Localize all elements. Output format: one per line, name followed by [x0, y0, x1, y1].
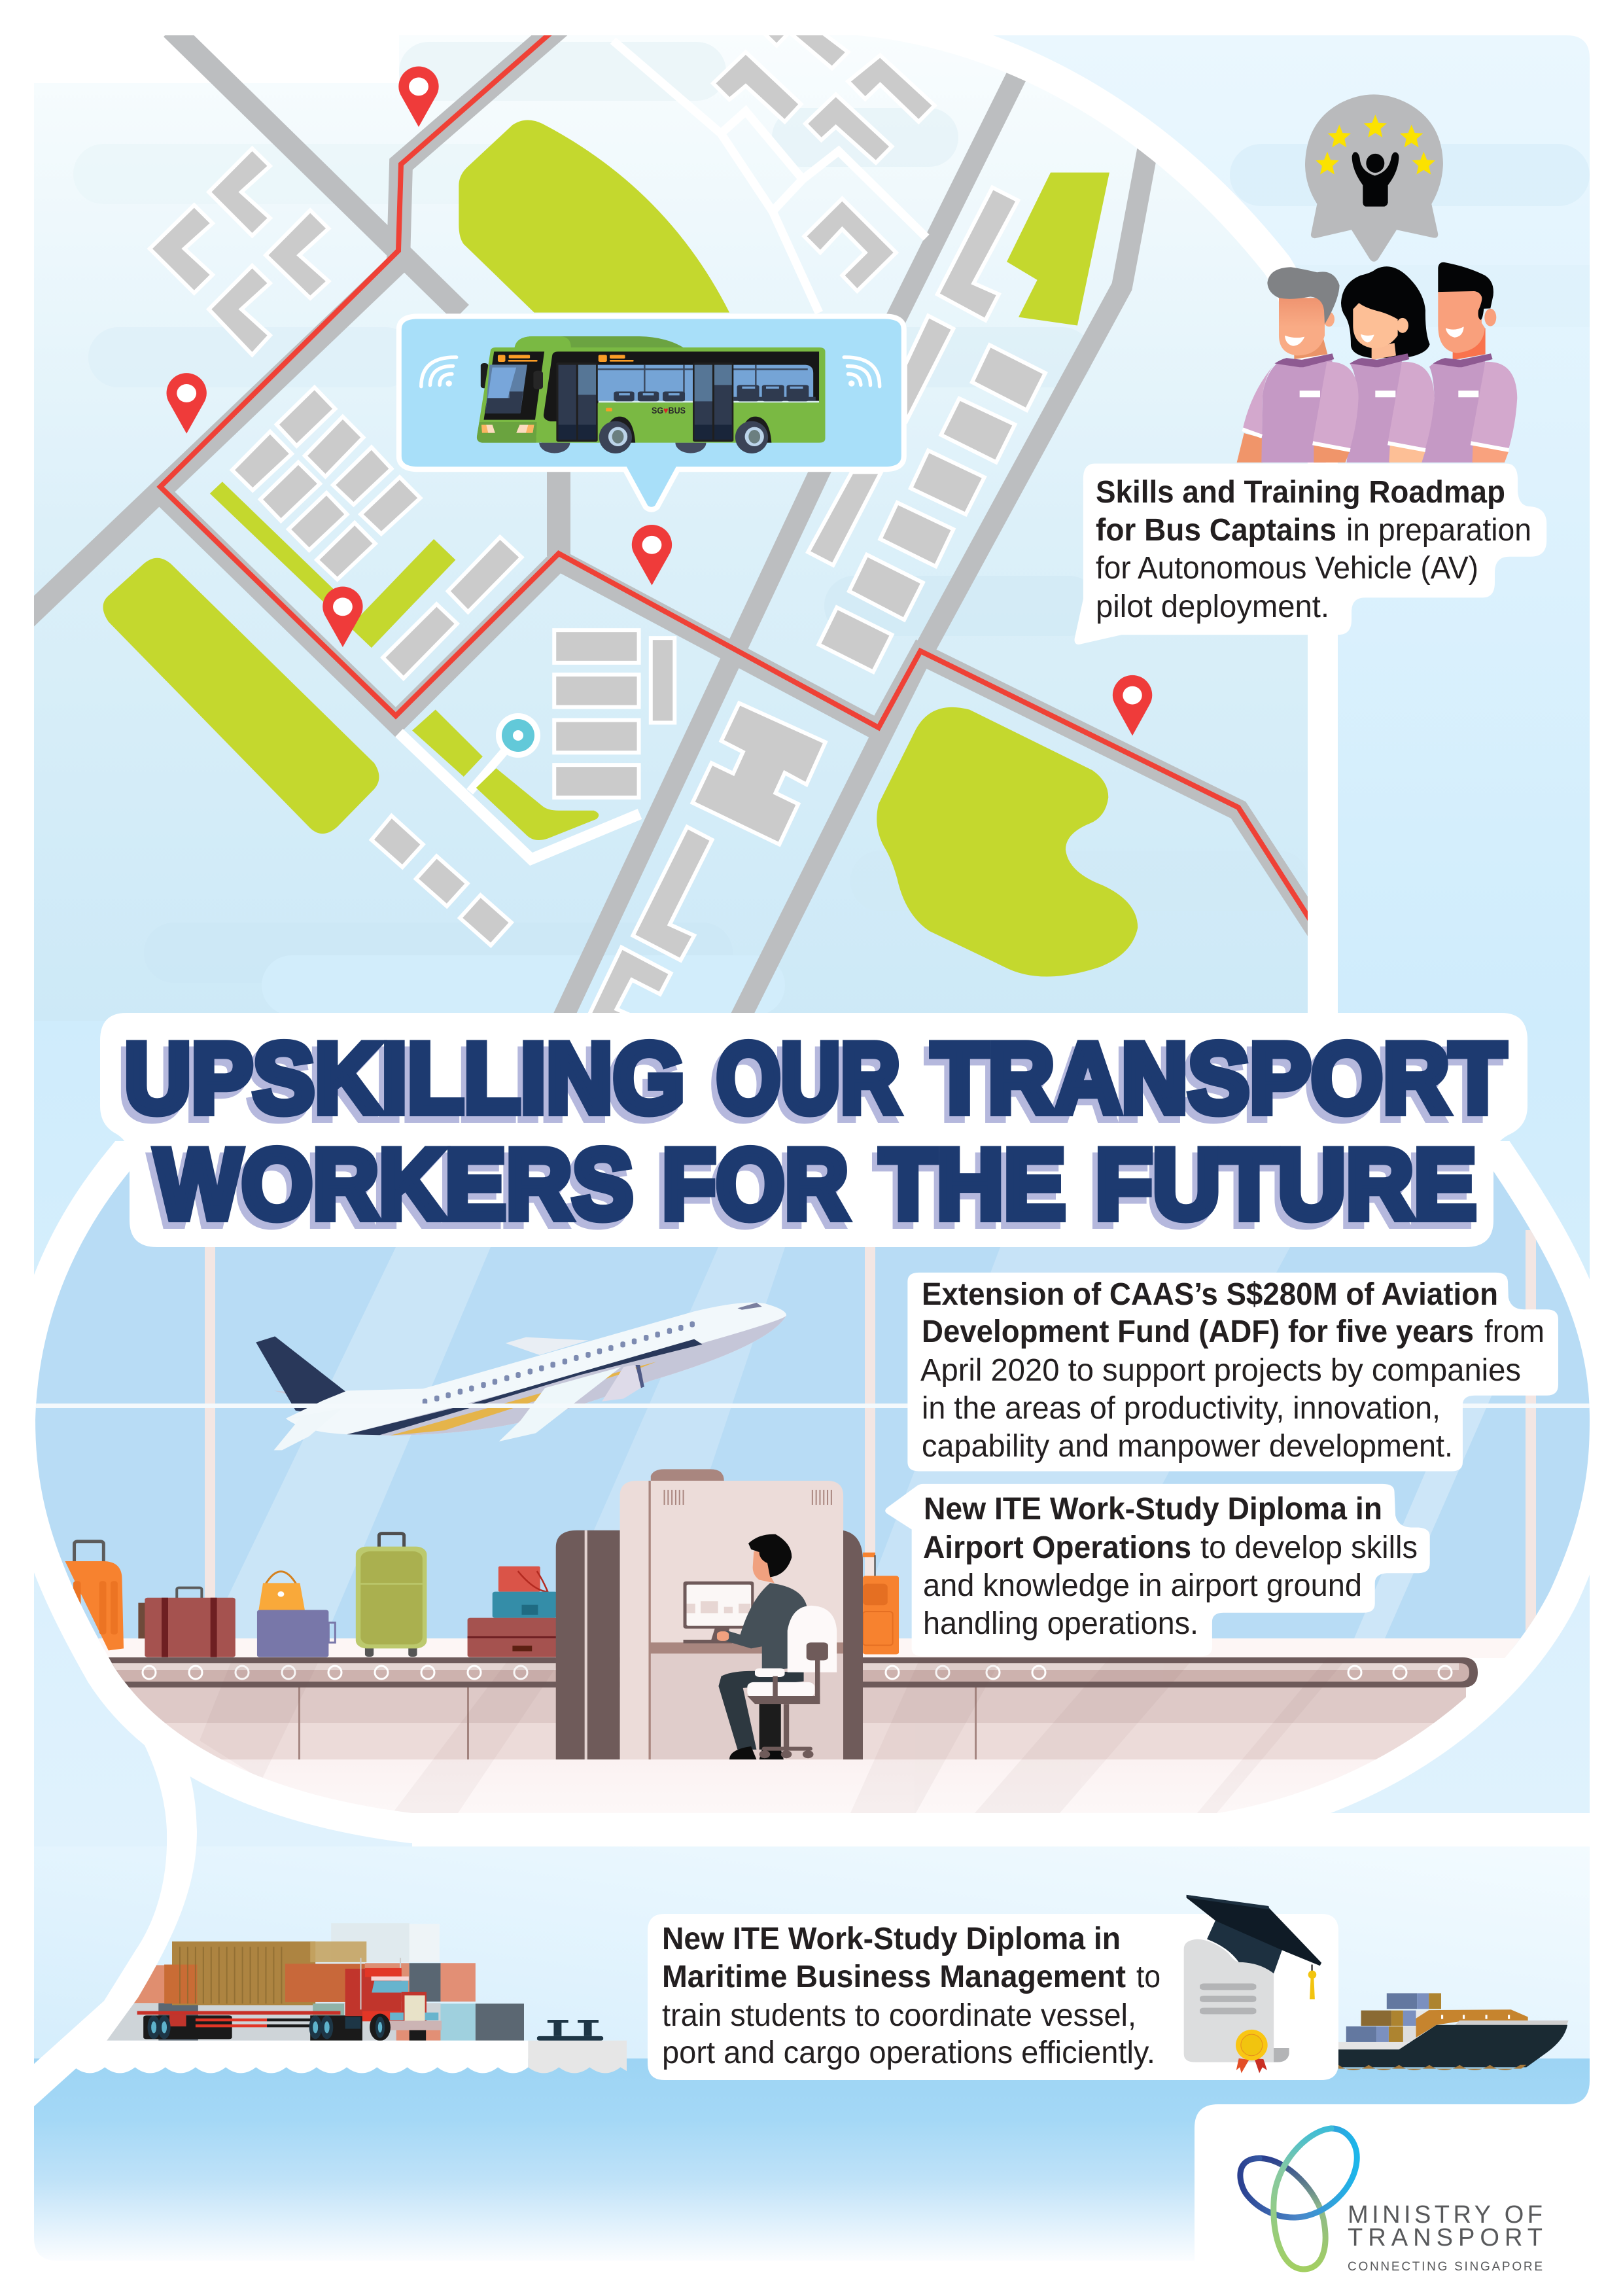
text block: airport operations diploma: New ITE Work-Study Diploma in	[924, 1492, 1382, 1527]
text block: aviation development fund: in the areas of productivity, innovation,	[922, 1391, 1440, 1426]
title shadow: WORKERS	[150, 1135, 628, 1246]
illustration: containers and truck	[52, 1923, 627, 2081]
map: thin white lanes	[399, 41, 926, 859]
panel: mid background	[34, 1021, 1590, 1852]
title shadow: FOR	[657, 1135, 843, 1246]
text block: aviation development fund: Development Fund (ADF) for five years	[922, 1315, 1474, 1349]
port: water	[34, 2058, 1590, 2261]
text block: aviation development fund: capability and manpower development.	[922, 1429, 1453, 1464]
stacked bags	[468, 1566, 557, 1657]
maroon suitcase	[138, 1588, 236, 1657]
airport band bottom bar	[412, 1813, 1590, 1846]
logo text	[1348, 2201, 1543, 2274]
text block: airport operations diploma: to develop skills	[1200, 1530, 1418, 1565]
title shadow	[119, 1029, 1501, 1246]
icon: diploma and graduation cap	[1184, 1895, 1321, 2073]
bus logo text: SG♥BUS	[652, 405, 686, 415]
logo text: MINISTRY OF	[1348, 2201, 1543, 2229]
icons: red map pins	[167, 66, 672, 647]
text block: aviation development fund: April 2020 to support projects by companies	[920, 1353, 1521, 1388]
title text: TRANSPORT	[932, 1023, 1506, 1134]
purple suitcase and yellow handbag	[257, 1572, 335, 1657]
icon: bollard	[537, 2020, 603, 2041]
floor light shadows	[230, 1665, 1261, 1813]
green suitcase	[356, 1534, 427, 1657]
title text: FUTURE	[1095, 1129, 1476, 1240]
text block: aviation development fund: Extension of CAAS’s S$280M of Aviation	[922, 1277, 1498, 1312]
captain left	[1237, 267, 1359, 463]
title plaque	[100, 1013, 1527, 1247]
gold seal	[1236, 2030, 1268, 2073]
map: buildings right	[785, 29, 1045, 672]
map: green parks	[103, 120, 1138, 977]
text block: airport operations diploma: and knowledge in airport ground	[923, 1568, 1362, 1603]
icon: wifi left	[421, 357, 457, 387]
illustration: work booth	[556, 1469, 843, 1759]
text block: airport operations diploma	[885, 1484, 1430, 1656]
title shadow: OUR	[711, 1029, 895, 1140]
title shadow: THE	[875, 1135, 1060, 1246]
text block: skills and training roadmap: for Autonomous Vehicle (AV)	[1096, 551, 1478, 586]
title text: WORKERS	[155, 1129, 633, 1240]
map: buildings left	[150, 29, 826, 1042]
window frame horizontal bar	[0, 1404, 1623, 1408]
title text	[124, 1023, 1506, 1240]
red truck	[137, 1958, 442, 2041]
white arc band	[850, 20, 1323, 1027]
title text: OUR	[716, 1023, 900, 1134]
quay	[52, 2041, 528, 2081]
illustration: airplane	[256, 1303, 786, 1450]
captain right	[1422, 262, 1517, 463]
title text: THE	[880, 1129, 1066, 1240]
bus callout bubble	[399, 316, 904, 510]
orange suitcase	[65, 1542, 124, 1650]
title shadow: TRANSPORT	[926, 1029, 1501, 1140]
panel: cloud streaks on right	[1230, 144, 1590, 327]
light beams	[203, 1247, 1526, 1649]
logo text: CONNECTING SINGAPORE	[1348, 2260, 1543, 2274]
illustration: luggage	[65, 1534, 557, 1657]
window frame posts	[205, 1230, 1536, 1649]
captain middle	[1341, 266, 1435, 463]
title text: FOR	[662, 1129, 848, 1240]
title shadow: UPSKILLING	[119, 1029, 680, 1140]
icon: green bus	[477, 336, 825, 453]
port: sky background	[34, 1846, 1590, 2069]
icon: wifi right	[844, 357, 880, 387]
logo mark: rings	[1240, 2128, 1357, 2269]
conveyor rollers	[143, 1666, 1452, 1679]
floor: lower skirts	[130, 1687, 1466, 1809]
illustration: cargo ship	[1338, 1993, 1569, 2070]
airplane windows	[423, 1321, 695, 1405]
icon: red map pin right	[1113, 675, 1152, 735]
S-curve white band	[26, 1682, 197, 2113]
text block: maritime business management: port and cargo operations efficiently.	[662, 2036, 1155, 2070]
icon: destination marker	[496, 713, 540, 758]
text block: skills and training roadmap: pilot deployment.	[1096, 590, 1329, 624]
text block: skills and training roadmap	[1075, 463, 1546, 645]
graduation cap	[1187, 1895, 1321, 1999]
text block: maritime business management: to	[1136, 1960, 1161, 1994]
office chair	[747, 1606, 837, 1758]
text block: skills and training roadmap: in preparation	[1346, 513, 1531, 548]
booth right wall	[843, 1530, 863, 1759]
text block: maritime business management: Maritime Business Management	[662, 1960, 1126, 1994]
conveyor belt	[0, 1657, 1478, 1759]
logo text: TRANSPORT	[1348, 2224, 1543, 2252]
text block: maritime business management: train students to coordinate vessel,	[662, 1998, 1136, 2033]
text block: airport operations diploma: handling operations.	[923, 1606, 1198, 1641]
text block: maritime business management	[648, 1914, 1338, 2080]
panel: airport scene	[0, 1165, 1623, 1818]
text block: aviation development fund: from	[1484, 1315, 1544, 1349]
badge: star rating medal	[1305, 94, 1443, 262]
logo: ministry of transport	[1240, 2128, 1543, 2274]
worker	[717, 1534, 807, 1759]
map: bus route	[160, 28, 1318, 932]
floor: sill	[98, 1638, 1520, 1658]
panel: map background	[34, 35, 1323, 1021]
title text: UPSKILLING	[124, 1023, 685, 1134]
text block: skills and training roadmap: for Bus Captains	[1096, 513, 1336, 548]
text block: airport operations diploma: Airport Operations	[923, 1530, 1191, 1565]
text block: aviation development fund	[907, 1273, 1558, 1471]
icon: cheering person	[1352, 152, 1399, 207]
quay: grey dock	[528, 2041, 627, 2073]
airport band outline	[35, 1171, 1590, 1813]
text block: maritime business management: New ITE Work-Study Diploma in	[662, 1922, 1121, 1956]
illustration: orange case behind booth	[863, 1553, 899, 1654]
panel: upper background	[34, 35, 1590, 1023]
sky	[0, 1165, 1623, 1649]
title shadow: FUTURE	[1090, 1135, 1471, 1246]
illustration: three bus captains	[1237, 262, 1517, 463]
icon: five stars	[1316, 115, 1435, 175]
computer monitor	[684, 1581, 754, 1643]
text block: skills and training roadmap: Skills and Training Roadmap	[1096, 475, 1505, 510]
map: roads	[20, 26, 1318, 1024]
diploma scroll	[1184, 1939, 1289, 2062]
container stack	[107, 1923, 524, 2041]
